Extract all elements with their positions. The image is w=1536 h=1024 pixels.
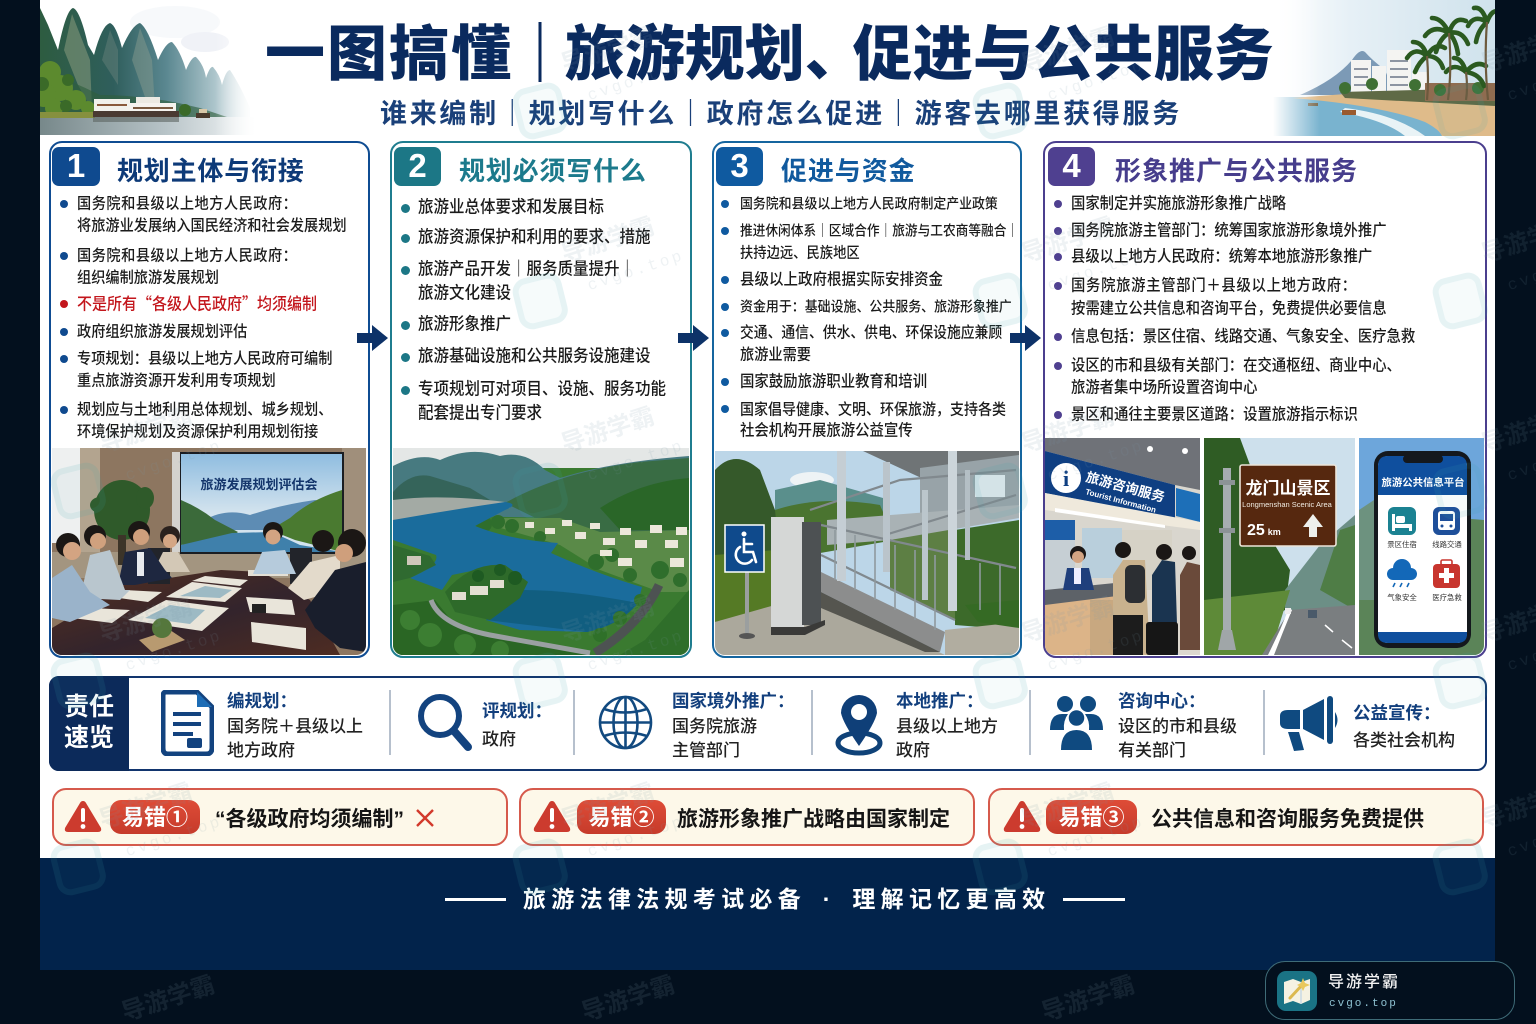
item: 组织编制旅游发展规划 [77,269,219,287]
icon: document [161,690,214,756]
header photo: karst mountains and river [40,8,244,135]
icon: map pin [835,693,883,756]
item: evaluate plan [417,688,547,760]
item: 推进休闲体系｜区域合作｜旅游与工农商等融合｜ [740,223,1019,239]
panel 4: image promotion and public services [1043,141,1487,658]
item: 国家制定并实施旅游形象推广战略 [1071,195,1286,213]
responsibility overview bar [49,676,1487,771]
heading 1: 规划主体与衔接 [117,156,305,186]
photo: public information app on phone: 医疗急救 [1432,593,1462,602]
pitfall 2 [519,788,975,846]
item: 配套提出专门要求 [418,404,542,423]
pill label: 易错③ [1058,805,1124,830]
item [721,324,1002,364]
item [60,350,332,390]
item: 专项规划可对项目、设施、服务功能 [418,380,666,399]
heading 4: 形象推广与公共服务 [1115,156,1358,186]
list 3 [721,195,1019,440]
item: 规划应与土地利用总体规划、城乡规划、 [77,401,332,419]
text: 国务院旅游 [672,717,757,736]
item: consultation center [1050,688,1245,760]
icon: cross [416,809,434,827]
pitfall text: “各级政府均须编制” [215,808,404,831]
text: 政府 [896,741,930,760]
item: 旅游产品开发｜服务质量提升｜ [418,260,635,279]
pill label: 易错① [122,805,188,830]
photo: tourist information counter: Tourist Information [1084,487,1157,515]
bar label block: 责任 [64,693,114,721]
footer line left [445,898,506,900]
icon: megaphone [1280,696,1341,752]
icon: warning triangle [533,800,571,833]
list 2 [401,198,666,423]
icon: warning triangle [1003,800,1041,833]
item: 交通、通信、供水、供电、环保设施应兼顾 [740,324,1002,341]
item: 国家倡导健康、文明、环保旅游，支持各类 [740,400,1006,418]
item: red warning: 不是所有“各级人民政府”均须编制 [77,292,317,315]
list 4 [1054,194,1415,424]
photo: public information app on phone [1359,438,1484,655]
item: 专项规划：县级以上地方人民政府可编制 [77,350,332,368]
bar label block: 速览 [64,724,114,752]
item: compile plan [160,688,370,760]
list 1 [60,195,347,441]
item: 将旅游业发展纳入国民经济和社会发展规划 [77,217,347,235]
arrow: panel 2 to panel 3 [678,325,709,351]
item: 旅游业总体要求和发展目标 [418,198,604,217]
item [401,380,666,423]
main title: 一图搞懂｜旅游规划 促进与公共服务 [265,21,1274,88]
badge 1 [52,147,100,186]
brand badge [1265,961,1515,1020]
heading 2: 规划必须写什么 [459,156,647,186]
item: 县级以上政府根据实际安排资金 [740,271,943,289]
badge 3: 3 [730,147,749,184]
photo: tourist information counter: 旅游咨询服务 [1084,468,1167,505]
badge 2: 2 [408,147,427,184]
photo: aerial lake and town [393,448,689,655]
item [60,247,297,287]
text: 有关部门 [1118,741,1186,760]
item [1054,356,1401,397]
item: 旅游资源保护和利用的要求、措施 [418,228,651,247]
item: 国务院和县级以上地方人民政府： [77,195,297,213]
footer band [40,858,1495,970]
item: 社会机构开展旅游公益宣传 [740,422,913,440]
photo: public information app on phone: 气象安全 [1387,593,1417,602]
panel 2: what plans must contain [390,141,692,658]
footer slogan: 旅游法律法规考试必备 · 理解记忆更高效 [523,886,1050,912]
bar label block [49,676,129,771]
item: 旅游形象推广 [418,315,511,334]
brand name: 导游学霸 [1328,974,1400,991]
photo: planning evaluation meeting: 旅游发展规划评估会 [200,477,318,492]
badge 2 [394,147,441,186]
photo: scenic area road sign: Longmenshan Scenic Area [1242,500,1333,509]
photo: tourist information counter [1045,438,1200,655]
pill label [577,800,666,834]
item [60,401,332,441]
item [721,400,1006,440]
label: 国家境外推广： [672,691,794,711]
item: overseas promotion [598,688,793,760]
item: local promotion [835,688,1010,760]
header photo: tropical beach and hotels [1276,0,1495,136]
photo: public information app on phone: 景区住宿 [1387,540,1417,549]
arrow: panel 1 to panel 2 [357,325,388,351]
brand url: cvgo.top [1329,998,1398,1010]
pitfall text: 公共信息和咨询服务免费提供 [1151,808,1424,831]
item: 扶持边远、民族地区 [740,244,860,261]
label: 本地推广： [896,691,984,711]
item: 按需建立公共信息和咨询平台，免费提供必要信息 [1071,300,1387,318]
icon: magnifier [417,693,473,752]
item: public welfare publicity [1280,688,1460,760]
text: 各类社会机构 [1353,731,1455,750]
text: 国务院＋县级以上 [227,717,363,736]
pitfall 1 [52,788,508,846]
heading 3: 促进与资金 [781,156,916,186]
text: 设区的市和县级 [1118,717,1237,736]
badge 1: 1 [67,147,85,184]
item [721,223,1019,261]
item: 景区和通往主要景区道路：设置旅游指示标识 [1071,406,1358,424]
item: 信息包括：景区住宿、线路交通、气象安全、医疗急救 [1071,328,1415,346]
arrow: panel 3 to panel 4 [1010,325,1041,351]
subtitle: 谁来编制｜规划写什么｜政府怎么促进｜游客去哪里获得服务 [380,99,1182,129]
footer line right [1063,898,1125,900]
item [60,195,347,235]
badge 4 [1048,147,1095,186]
main title: 、 [805,21,865,88]
panel 1: planning subjects [49,141,370,658]
pill label: 易错② [588,805,654,830]
item: 县级以上地方人民政府：统筹本地旅游形象推广 [1071,248,1372,266]
text: 县级以上地方 [896,717,998,736]
photo: public information app on phone: 旅游公共信息平台 [1381,476,1465,489]
pitfall 3 [988,788,1484,846]
item: 环境保护规划及资源保护利用规划衔接 [77,423,318,441]
icon: globe [598,694,653,751]
item: 政府组织旅游发展规划评估 [77,323,247,341]
photo: scenic area road sign: 龙门山景区 [1246,479,1330,498]
pill label [110,800,200,834]
text: 地方政府 [227,741,295,760]
text: 主管部门 [672,741,740,760]
label: 咨询中心： [1118,691,1206,711]
item: 重点旅游资源开发利用专项规划 [77,372,276,390]
badge 4: 4 [1062,147,1081,184]
item [1054,276,1387,318]
icon: warning triangle [64,800,102,833]
item: 设区的市和县级有关部门：在交通枢纽、商业中心、 [1071,357,1401,375]
item: 旅游文化建设 [418,284,511,303]
panel 3: promotion and funding [712,141,1022,658]
item: 国务院和县级以上地方人民政府制定产业政策 [740,195,998,212]
label: 编规划： [227,691,297,711]
item: 旅游基础设施和公共服务设施建设 [418,347,651,366]
photo: public information app on phone: 线路交通 [1432,540,1462,549]
text: 政府 [482,730,516,749]
pitfall text: 旅游形象推广战略由国家制定 [677,808,950,831]
item: 国务院旅游主管部门＋县级以上地方政府： [1071,277,1357,295]
photo: accessible ramp facility [715,451,1019,655]
item: 国务院旅游主管部门：统筹国家旅游形象境外推广 [1071,222,1387,240]
photo: tourist information counter: i [1063,466,1069,491]
label: 公益宣传： [1353,703,1440,723]
main white sheet [40,0,1495,858]
badge 3 [716,147,763,186]
item [401,260,635,303]
item: 国务院和县级以上地方人民政府： [77,247,297,265]
item: 旅游者集中场所设置咨询中心 [1071,379,1257,397]
photo: scenic area road sign: 25 km [1247,522,1281,539]
photo: planning evaluation meeting [52,448,366,655]
item: 旅游业需要 [740,346,811,364]
pill label [1046,800,1137,834]
photo: scenic area road sign [1204,438,1355,655]
icon: people [1050,696,1103,751]
item: 国家鼓励旅游职业教育和培训 [740,373,927,391]
item: 资金用于：基础设施、公共服务、旅游形象推广 [740,298,1012,315]
label: 评规划： [482,701,552,721]
icon: brand map [1277,971,1317,1011]
